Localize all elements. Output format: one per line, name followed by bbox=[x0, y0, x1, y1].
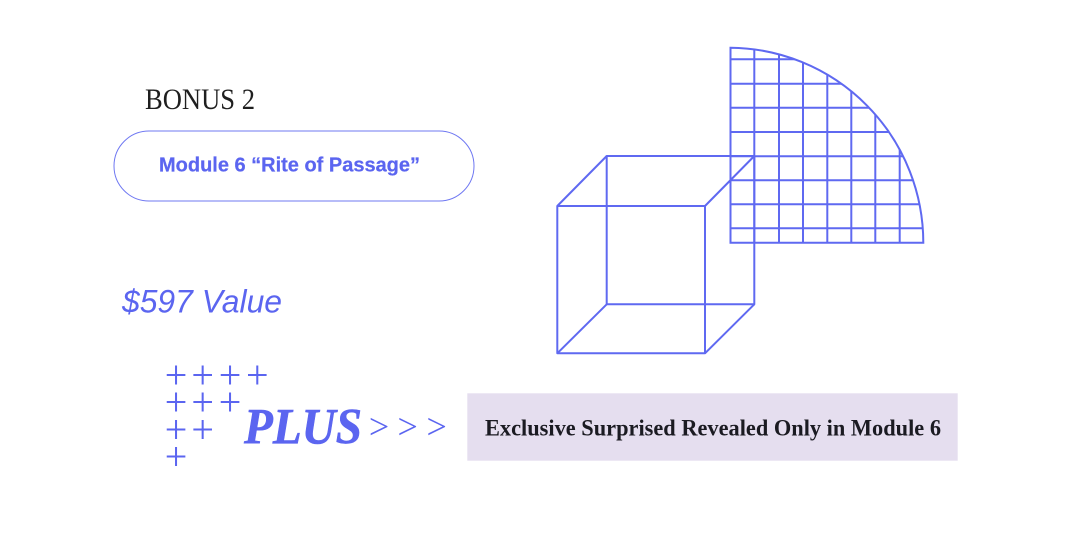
callout: exclusive surprise: Exclusive Surprised Revealed Only in Module 6 bbox=[485, 416, 941, 442]
text: value: $597 Value bbox=[121, 284, 282, 320]
callout: exclusive surprise bbox=[467, 393, 958, 461]
decoration: plus signs triangle: +++ bbox=[165, 380, 241, 425]
text: plus: PLUS bbox=[243, 400, 362, 456]
decoration: plus signs triangle: + bbox=[165, 434, 187, 479]
pill: module title: Module 6 “Rite of Passage” bbox=[159, 154, 420, 176]
decoration: plus signs triangle bbox=[165, 353, 269, 479]
icon: quarter circle grid bbox=[730, 46, 924, 244]
decoration: plus signs triangle: ++ bbox=[165, 407, 214, 452]
arrows: chevrons: >>> bbox=[369, 407, 447, 447]
pill: module title bbox=[114, 131, 474, 201]
decoration: plus signs triangle: ++++ bbox=[165, 353, 269, 398]
heading: bonus 2: BONUS 2 bbox=[145, 84, 255, 116]
icon: wireframe cube bbox=[557, 156, 754, 353]
infographic canvas bbox=[114, 46, 958, 466]
